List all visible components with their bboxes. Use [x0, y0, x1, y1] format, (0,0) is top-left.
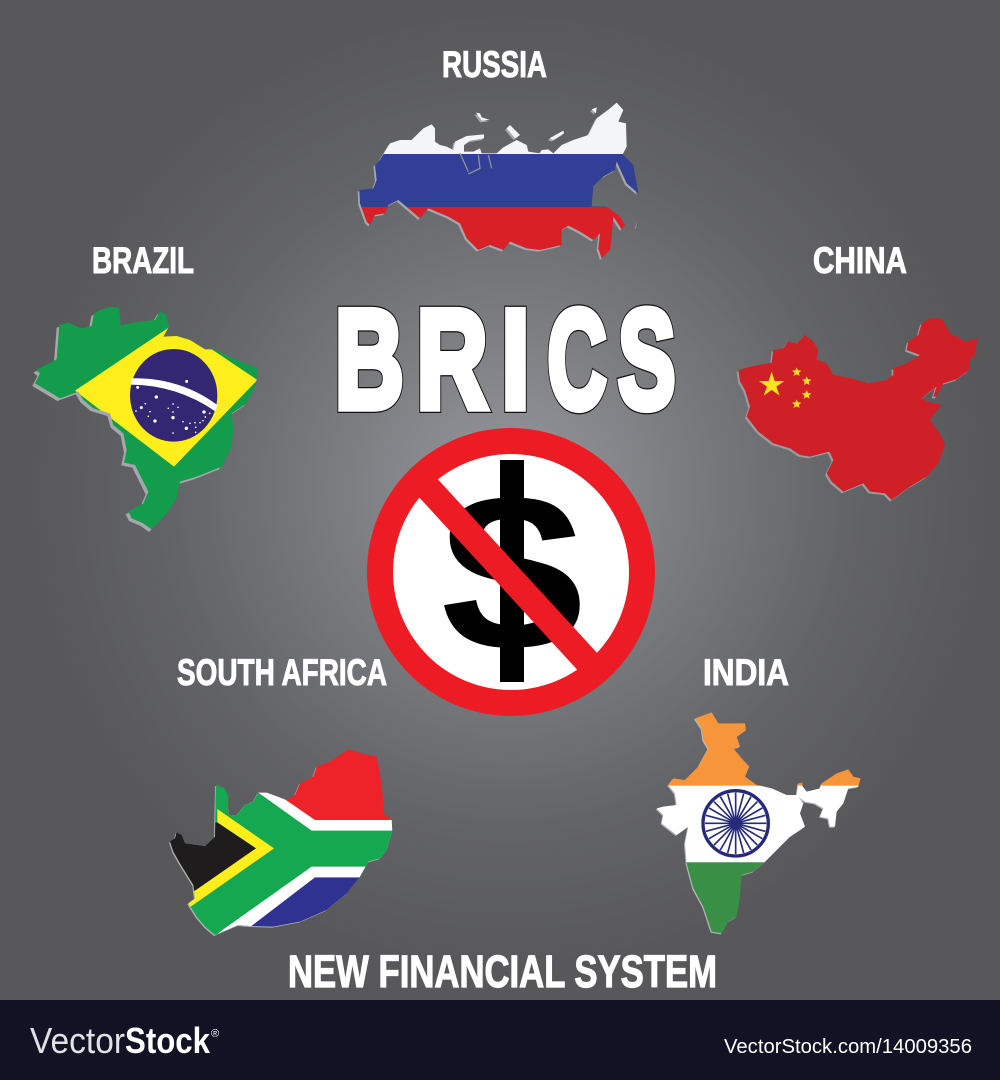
- title: BRICS: I: [502, 280, 530, 438]
- title: BRICS: B: [335, 280, 404, 438]
- title: BRICS: [335, 280, 676, 438]
- map: Brazil flag: [32, 306, 258, 532]
- label: India: INDIA: [703, 652, 789, 693]
- title: BRICS: S: [618, 280, 676, 438]
- label: South Africa: SOUTH AFRICA: [177, 652, 387, 693]
- footer logo: ®: [211, 1028, 219, 1040]
- footer bar: [0, 1000, 1000, 1080]
- footer url: VectorStock.com/14009356: [724, 1036, 972, 1058]
- title: BRICS: R: [417, 280, 488, 438]
- footer logo: Stock: [125, 1020, 211, 1061]
- label: Russia: RUSSIA: [442, 44, 547, 85]
- title: BRICS: C: [548, 280, 606, 438]
- icon: Ashoka chakra: [703, 791, 768, 856]
- map: India flag: [656, 712, 860, 934]
- icon: no dollar sign: [367, 428, 655, 716]
- title: BRICS: B: [335, 280, 404, 438]
- title: BRICS: C: [548, 280, 606, 438]
- map: China flag: [737, 318, 977, 502]
- title: BRICS: I: [502, 280, 530, 438]
- label: China: CHINA: [813, 240, 907, 281]
- icon: no dollar sign: $: [441, 448, 583, 698]
- label: Brazil: BRAZIL: [92, 240, 194, 281]
- footer logo: [30, 1020, 219, 1061]
- title: BRICS: S: [618, 280, 676, 438]
- footer logo: Vector: [30, 1020, 125, 1061]
- title: BRICS: R: [417, 280, 488, 438]
- label: New Financial System: NEW FINANCIAL SYSTEM: [288, 946, 717, 997]
- map: South Africa flag: [169, 750, 392, 936]
- map: Russia flag: [358, 102, 639, 260]
